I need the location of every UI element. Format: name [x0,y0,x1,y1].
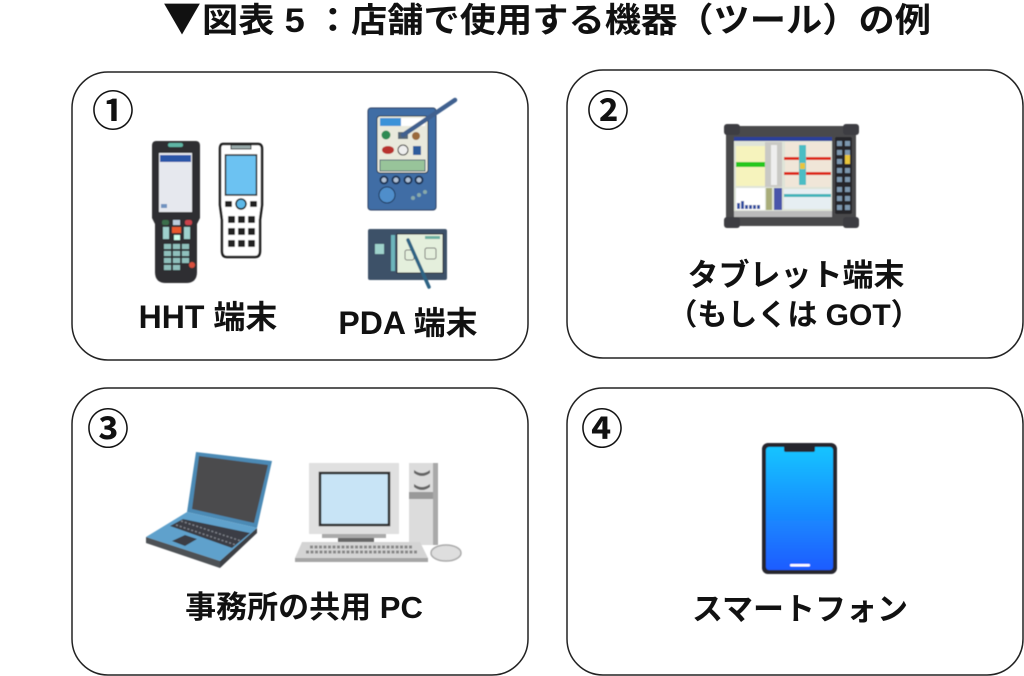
number 2: ② [587,88,629,135]
panel: 3 office PC [72,388,528,675]
label: smartphone: スマートフォン [692,592,908,627]
number 3: ③ [87,406,129,453]
panel: 4 smartphone [567,388,1023,675]
label: HHT terminal: HHT 端末 [139,299,277,335]
icon: HHT white terminal [220,144,262,257]
title: 図表 5 ：店舗で使用する機器（ツール）の例 [202,2,931,40]
label: office shared PC: 事務所の共用 PC [185,590,423,625]
icon: laptop [146,452,272,568]
label: tablet terminal [667,258,921,332]
icon: PDA with stylus [368,100,455,210]
panel: 2 tablet [567,70,1023,358]
number 4: ④ [581,406,623,453]
label: tablet terminal: タブレット端末 [688,258,904,293]
label: PDA terminal: PDA 端末 [338,305,478,341]
number 1: ① [92,88,134,135]
icon: smartphone [762,443,837,574]
icon: tablet terminal [724,124,859,228]
panel: 1 handheld devices [72,72,528,360]
icon: small PDA with stylus [368,229,447,287]
icon: HHT dark terminal [152,141,200,283]
icon: desktop PC [295,463,461,562]
label: tablet terminal: （もしくは GOT） [667,299,921,332]
